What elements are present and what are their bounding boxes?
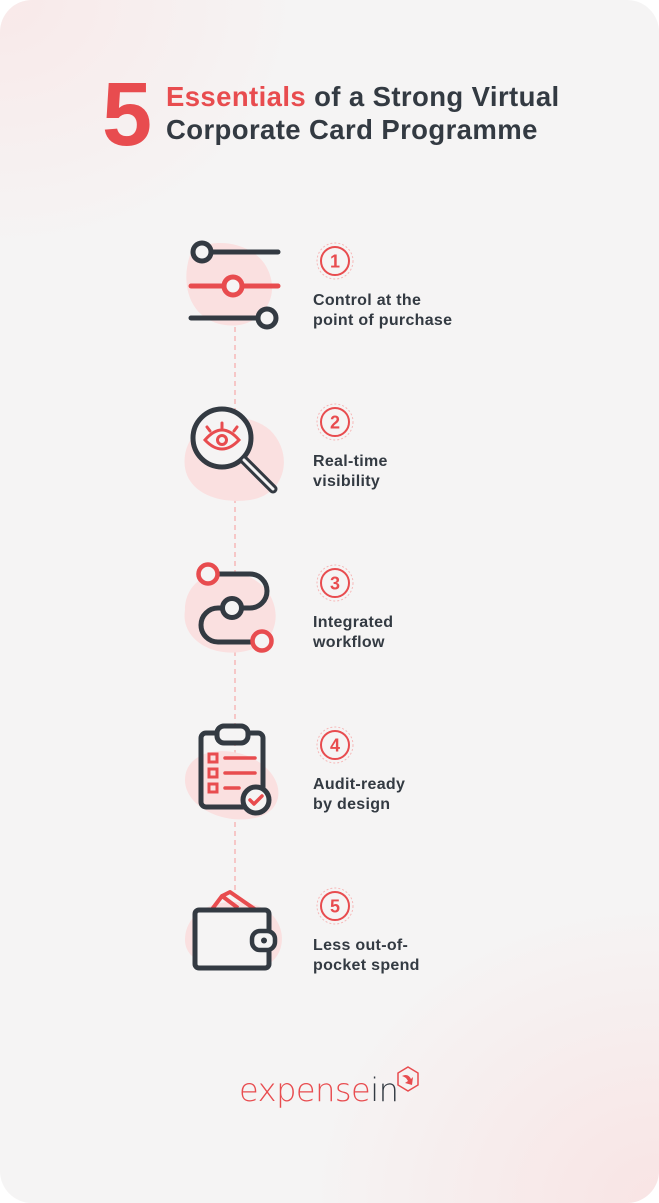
- logo: [239, 1066, 419, 1109]
- label 2: visibility: [313, 473, 380, 490]
- item 4: [313, 726, 405, 813]
- title text: Essentials of a Strong Virtual: [166, 81, 560, 112]
- title text: Corporate Card Programme: [166, 114, 538, 145]
- big number 5: 5: [102, 65, 152, 165]
- item 1: [313, 242, 452, 329]
- item 2: [313, 404, 388, 490]
- label 4: Audit-ready: [313, 776, 405, 793]
- number badge 1: [316, 242, 354, 280]
- number badge 4: [316, 726, 354, 764]
- icon: sliders: [186, 243, 278, 327]
- icon: wallet: [185, 892, 282, 970]
- number badge 5: [316, 888, 354, 924]
- label 5: Less out-of-: [313, 937, 408, 954]
- label 3: workflow: [313, 634, 385, 651]
- label 3: [313, 614, 393, 651]
- icon: magnifier with eye: [185, 409, 284, 501]
- logo icon: [397, 1066, 419, 1092]
- label 3: Integrated: [313, 614, 393, 631]
- icon: workflow path: [185, 564, 276, 653]
- number badge 1: 1: [330, 252, 340, 272]
- title: [102, 65, 560, 165]
- number badge 3: [316, 564, 354, 602]
- number badge 2: [316, 404, 354, 440]
- number badge 3: 3: [330, 574, 340, 594]
- title text: [166, 81, 560, 145]
- icon: clipboard checklist: [185, 726, 278, 819]
- label 4: [313, 776, 405, 813]
- label 1: Control at the: [313, 292, 421, 309]
- label 4: by design: [313, 796, 390, 813]
- label 2: [313, 453, 388, 490]
- number badge 4: 4: [330, 736, 340, 756]
- number badge 2: 2: [330, 412, 340, 432]
- label 5: pocket spend: [313, 957, 420, 974]
- item 3: [313, 564, 393, 651]
- item 5: [313, 888, 420, 974]
- number badge 5: 5: [330, 896, 340, 916]
- label 1: [313, 292, 452, 329]
- label 5: [313, 937, 420, 974]
- logo text: expensein: [239, 1071, 398, 1109]
- label 2: Real-time: [313, 453, 388, 470]
- label 1: point of purchase: [313, 312, 452, 329]
